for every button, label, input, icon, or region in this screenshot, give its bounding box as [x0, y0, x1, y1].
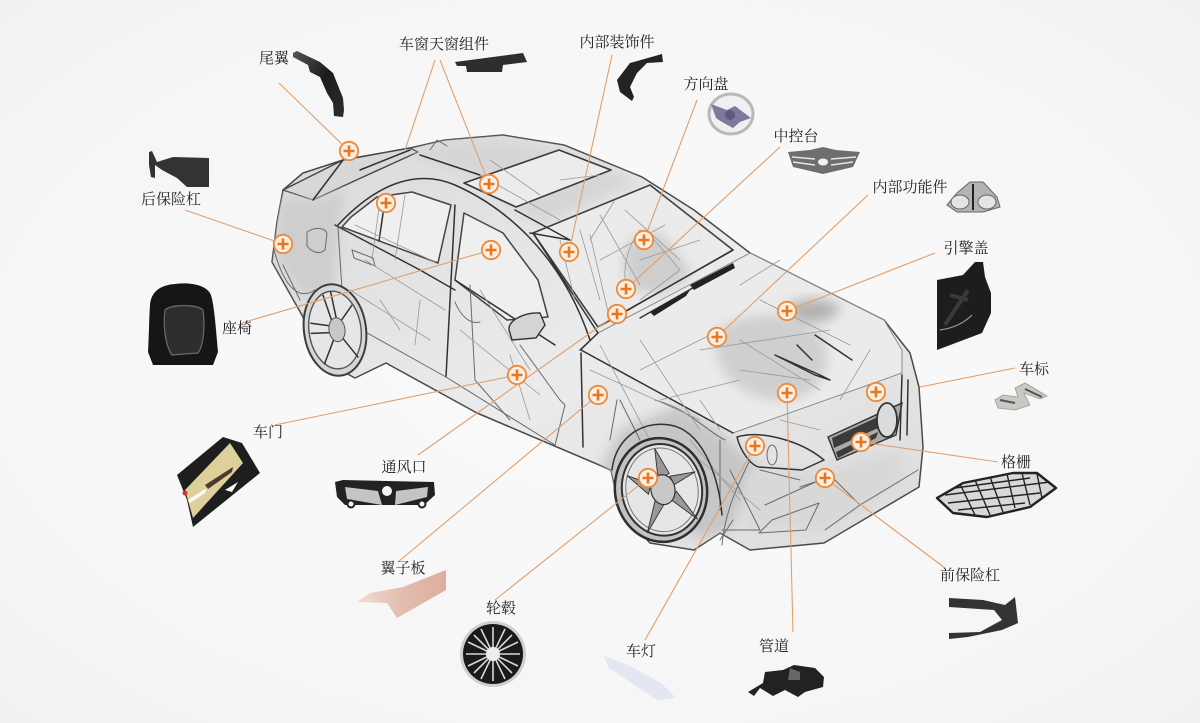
- part: front bumper: 前保险杠: [940, 567, 1000, 584]
- windshield interior seats: [622, 232, 694, 295]
- hood: [581, 253, 902, 433]
- side mirror: [509, 313, 545, 340]
- part: wheel hub: [460, 600, 526, 687]
- hotspot markers: [274, 142, 885, 487]
- part: steering wheel: [683, 76, 753, 134]
- body shading: [275, 140, 905, 540]
- rear side window: [342, 192, 451, 263]
- rear wheel: [298, 280, 372, 380]
- part: door panel: 车门: [253, 424, 283, 441]
- sunroof: [464, 150, 611, 207]
- part: interior functional part: 内部功能件: [872, 179, 948, 196]
- engine bay shading: [716, 299, 842, 401]
- part: center console: [773, 128, 860, 174]
- part: car emblem: 车标: [1019, 361, 1050, 378]
- part: engine hood: [937, 239, 991, 350]
- part: engine hood: 引擎盖: [943, 239, 989, 257]
- front wheel: [607, 431, 715, 549]
- part: window and sunroof assembly: [399, 35, 527, 72]
- part: front bumper: [940, 567, 1018, 639]
- part: seat: 座椅: [222, 320, 252, 337]
- car illustration: [272, 135, 923, 550]
- body lines: [274, 140, 918, 545]
- part: steering wheel: 方向盘: [683, 76, 729, 93]
- part: rear bumper: [141, 151, 209, 208]
- part: grille lattice: [937, 453, 1056, 517]
- part: grille lattice: 格栅: [1001, 453, 1031, 471]
- part: air vent: 通风口: [381, 459, 427, 476]
- part: wheel hub: 轮毂: [486, 600, 516, 617]
- part: seat: [148, 283, 252, 365]
- part: rear bumper: 后保险杠: [141, 191, 201, 208]
- grille: [828, 375, 908, 460]
- car body: [272, 135, 923, 550]
- front side window: [455, 213, 548, 320]
- part: lamp: 车灯: [626, 643, 656, 660]
- part: fender: 翼子板: [380, 559, 426, 577]
- part: center console: 中控台: [773, 128, 819, 145]
- part: door panel: [177, 424, 283, 527]
- windshield: [533, 185, 733, 327]
- leader lines: [185, 55, 1015, 640]
- part: pipes: 管道: [759, 638, 789, 655]
- part: window and sunroof assembly: 车窗天窗组件: [399, 35, 489, 53]
- infographic: car parts diagram: [142, 34, 1058, 700]
- part: spoiler: 尾翼: [259, 50, 290, 67]
- part: fender: [357, 559, 446, 618]
- part: pipes: [748, 638, 824, 697]
- trunk and spoiler: [283, 148, 418, 200]
- part: interior trim: [579, 34, 663, 101]
- part: car emblem: [995, 361, 1050, 410]
- part: interior trim: 内部装饰件: [579, 34, 655, 51]
- part: lamp: [604, 643, 676, 700]
- part: interior functional part: [872, 179, 1000, 212]
- part: spoiler: [259, 50, 344, 117]
- part: air vent: [335, 459, 435, 508]
- front wheel arch: [612, 424, 722, 515]
